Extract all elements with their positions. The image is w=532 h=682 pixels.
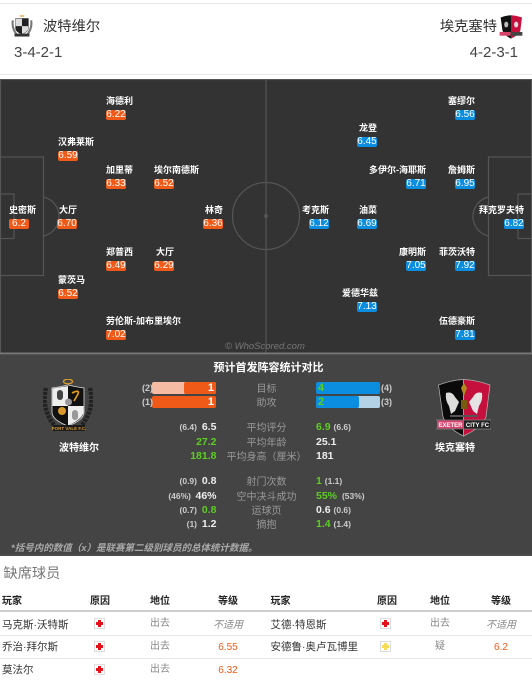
- player: 大厅: [57, 205, 77, 229]
- icon: Exeter City crest: [436, 379, 491, 436]
- away goals bar: 4: [318, 382, 324, 394]
- row: 马克斯·沃特斯 and 艾德·特恩斯: 出去: [430, 618, 450, 629]
- player: 大厅: 6.29: [154, 260, 174, 271]
- home stat values: 0.8: [202, 504, 216, 516]
- player: 海德利: 海德利: [106, 96, 133, 106]
- player: 油菜: 6.69: [357, 218, 377, 229]
- player: 海德利: 6.22: [106, 109, 126, 120]
- player: 菲茨沃特: 菲茨沃特: [439, 247, 475, 257]
- player: 大厅: 6.70: [57, 218, 77, 229]
- table header row: 玩家: [2, 596, 22, 607]
- icon: Port Vale small crest: [12, 15, 32, 37]
- home stat values: 1.2: [202, 518, 216, 530]
- panel: pitch with predicted lineups: [0, 79, 532, 355]
- player: 塞缪尔: 塞缪尔: [448, 96, 475, 106]
- row: 马克斯·沃特斯 and 艾德·特恩斯: [0, 612, 532, 636]
- row: 乔治·拜尔斯 and 安德鲁·奥卢瓦博里: 出去: [150, 641, 170, 652]
- player: 劳伦斯-加布里埃尔: [106, 316, 181, 340]
- player: 林奇: 林奇: [205, 205, 223, 215]
- player: 加里蒂: [106, 165, 133, 189]
- player: 大厅: 大厅: [59, 205, 77, 215]
- player: 拜克罗夫特: [479, 205, 524, 229]
- pitch markings: [0, 79, 532, 354]
- row: 莫法尔: 6.32: [218, 665, 238, 676]
- row: 乔治·拜尔斯 and 安德鲁·奥卢瓦博里: 乔治·拜尔斯: [2, 641, 58, 653]
- bar row: assists: [142, 396, 392, 408]
- stat labels: [226, 383, 306, 531]
- player: 多伊尔-海耶斯: [369, 165, 426, 189]
- player: 考克斯: [302, 205, 329, 229]
- player: 汉弗莱斯: 汉弗莱斯: [58, 137, 94, 147]
- stat labels: 空中决斗成功: [236, 492, 296, 503]
- home stat values: 27.2: [196, 436, 216, 448]
- player: 海德利: [106, 96, 133, 120]
- row: 马克斯·沃特斯 and 艾德·特恩斯: 马克斯·沃特斯: [2, 619, 68, 631]
- player: 史密斯: [9, 205, 36, 229]
- home assists baseline: (1): [142, 397, 153, 407]
- player: 郑普西: 郑普西: [106, 247, 133, 257]
- home stat values: 0.8: [202, 475, 216, 487]
- table header row: 原因: [377, 596, 397, 607]
- away team name: 埃克塞特: [440, 19, 497, 35]
- player: 埃尔南德斯: [154, 165, 199, 189]
- player: 爱德华兹: 7.13: [357, 301, 377, 312]
- away assists baseline: (3): [381, 397, 392, 407]
- stat labels: 平均身高（厘米）: [226, 452, 306, 463]
- home baseline values: (0.9): [180, 476, 197, 486]
- player: 考克斯: 6.12: [309, 218, 329, 229]
- icon: Exeter small crest: [500, 15, 522, 39]
- player: 伍德豪斯: [439, 316, 475, 340]
- row: 莫法尔: 莫法尔: [2, 664, 34, 676]
- home baseline values: (1): [187, 519, 197, 529]
- stat labels: 目标: [256, 384, 276, 395]
- player: 菲茨沃特: [439, 247, 475, 271]
- away assists bar: [316, 396, 380, 408]
- table header row: 玩家: [270, 596, 290, 607]
- stat labels: 助攻: [256, 398, 276, 409]
- player: 油菜: 油菜: [359, 205, 377, 215]
- icon: Port Vale crest: PORT VALE F.C.: [52, 426, 86, 431]
- stat labels: 射门次数: [246, 477, 286, 488]
- player: 拜克罗夫特: 拜克罗夫特: [479, 205, 524, 215]
- player: 拜克罗夫特: 6.82: [504, 218, 524, 229]
- home baseline values: (6.4): [180, 422, 197, 432]
- player: 劳伦斯-加布里埃尔: 7.02: [106, 329, 126, 340]
- icon: Exeter City crest: CITY FC: [466, 423, 490, 429]
- panel: absent players: [0, 556, 532, 682]
- stat labels: 摘抱: [256, 520, 276, 531]
- row: 乔治·拜尔斯 and 安德鲁·奥卢瓦博里: 6.2: [494, 642, 508, 653]
- away team label: 埃克塞特: [435, 443, 475, 454]
- player: 康明斯: 7.05: [406, 260, 426, 271]
- absent heading: 缺席球员: [4, 566, 60, 582]
- row: 乔治·拜尔斯 and 安德鲁·奥卢瓦博里: [0, 636, 532, 659]
- away goals bar: [316, 382, 380, 394]
- player: 考克斯: 考克斯: [302, 205, 329, 215]
- player: 詹姆斯: 6.95: [455, 178, 475, 189]
- away stat values: 6.9 (6.6): [316, 421, 351, 433]
- player: 汉弗莱斯: [58, 137, 94, 161]
- row: 马克斯·沃特斯 and 艾德·特恩斯: 不适用: [213, 620, 243, 631]
- player: 爱德华兹: [342, 288, 378, 312]
- home team label: 波特维尔: [59, 443, 99, 454]
- away goals baseline: (4): [381, 383, 392, 393]
- player: 菲茨沃特: 7.92: [455, 260, 475, 271]
- table header row: [0, 593, 532, 612]
- player: 伍德豪斯: 伍德豪斯: [439, 316, 475, 326]
- away formation: 4-2-3-1: [470, 44, 518, 61]
- player: 郑普西: 6.49: [106, 260, 126, 271]
- away assists bar: 2: [318, 396, 324, 408]
- home goals bar: 1: [208, 382, 214, 394]
- home assists bar: [152, 396, 216, 408]
- stats heading: 预计首发阵容统计对比: [214, 362, 324, 374]
- table header row: 地位: [150, 596, 170, 607]
- player: 爱德华兹: 爱德华兹: [342, 288, 378, 298]
- header: team names and formations: [0, 3, 532, 75]
- table header row: 地位: [430, 596, 450, 607]
- player: 史密斯: 史密斯: [9, 205, 36, 215]
- panel: lineup statistics comparison: [0, 355, 532, 556]
- row: 乔治·拜尔斯 and 安德鲁·奥卢瓦博里: 安德鲁·奥卢瓦博里: [270, 641, 358, 653]
- stat labels: 平均评分: [246, 423, 286, 434]
- player: 詹姆斯: 詹姆斯: [448, 165, 475, 175]
- stat labels: 运球页: [252, 506, 282, 517]
- icon: Exeter City crest: EXETER: [438, 423, 463, 429]
- away stat values: 0.6 (0.6): [316, 504, 351, 516]
- row: 马克斯·沃特斯 and 艾德·特恩斯: 出去: [150, 618, 170, 629]
- player: 伍德豪斯: 7.81: [455, 329, 475, 340]
- home baseline values: (46%): [168, 491, 191, 501]
- player: 大厅: [154, 247, 174, 271]
- player: 龙登: 龙登: [359, 123, 377, 133]
- table header row: 等级: [491, 596, 511, 607]
- player: 大厅: 大厅: [156, 247, 174, 257]
- home goals bar: [152, 382, 216, 394]
- row: 乔治·拜尔斯 and 安德鲁·奥卢瓦博里: 疑: [435, 641, 445, 652]
- footnote: *括号内的数值（x）是联赛第二级别球员的总体统计数据。: [11, 543, 257, 554]
- player: 林奇: 6.36: [203, 218, 223, 229]
- player: 多伊尔-海耶斯: 多伊尔-海耶斯: [369, 165, 426, 175]
- player: 蒙茨马: 6.52: [58, 288, 78, 299]
- player: 多伊尔-海耶斯: 6.71: [406, 178, 426, 189]
- row: 莫法尔: 出去: [150, 664, 170, 675]
- home goals baseline: (2): [142, 383, 153, 393]
- player: 塞缪尔: [448, 96, 475, 120]
- row: 乔治·拜尔斯 and 安德鲁·奥卢瓦博里: 6.55: [218, 642, 238, 653]
- player: 康明斯: 康明斯: [399, 247, 426, 257]
- home baseline values: [168, 422, 197, 529]
- player: 汉弗莱斯: 6.59: [58, 150, 78, 161]
- row: 马克斯·沃特斯 and 艾德·特恩斯: 不适用: [486, 620, 516, 631]
- home formation: 3-4-2-1: [14, 44, 62, 61]
- player: 油菜: [357, 205, 377, 229]
- table header row: 原因: [90, 596, 110, 607]
- watermark: © WhoScored.com: [225, 341, 305, 352]
- away stat values: 181: [316, 450, 334, 462]
- player: 蒙茨马: [58, 275, 85, 299]
- home stat values: 46%: [195, 490, 216, 502]
- home assists bar: 1: [208, 396, 214, 408]
- player: 加里蒂: 6.33: [106, 178, 126, 189]
- row: 马克斯·沃特斯 and 艾德·特恩斯: 艾德·特恩斯: [270, 619, 326, 631]
- player: 康明斯: [399, 247, 426, 271]
- player: 劳伦斯-加布里埃尔: 劳伦斯-加布里埃尔: [106, 316, 181, 326]
- home stat values: 6.5: [202, 421, 216, 433]
- stat labels: 平均年龄: [246, 438, 286, 449]
- player: 埃尔南德斯: 埃尔南德斯: [154, 165, 199, 175]
- player: 龙登: 6.45: [357, 136, 377, 147]
- table header row: 等级: [218, 596, 238, 607]
- player: 蒙茨马: 蒙茨马: [58, 275, 85, 285]
- bar row: goals: [142, 382, 392, 394]
- away stat values: 25.1: [316, 436, 336, 448]
- away stat values: 55% (53%): [316, 490, 365, 502]
- player: 詹姆斯: [448, 165, 475, 189]
- home stat values: [190, 421, 216, 530]
- home baseline values: (0.7): [180, 505, 197, 515]
- player: 埃尔南德斯: 6.52: [154, 178, 174, 189]
- row: 莫法尔: [2, 663, 238, 676]
- away stat values: 1.4 (1.4): [316, 518, 351, 530]
- home team name: 波特维尔: [43, 19, 100, 35]
- player: 加里蒂: 加里蒂: [106, 165, 133, 175]
- player: 龙登: [357, 123, 377, 147]
- player: 塞缪尔: 6.56: [455, 109, 475, 120]
- home stat values: 181.8: [190, 450, 216, 462]
- player: 郑普西: [106, 247, 133, 271]
- away stat values: [316, 421, 365, 530]
- away stat values: 1 (1.1): [316, 475, 342, 487]
- player: 史密斯: 6.2: [12, 218, 26, 229]
- player: 林奇: [203, 205, 223, 229]
- icon: Port Vale crest: [43, 379, 93, 431]
